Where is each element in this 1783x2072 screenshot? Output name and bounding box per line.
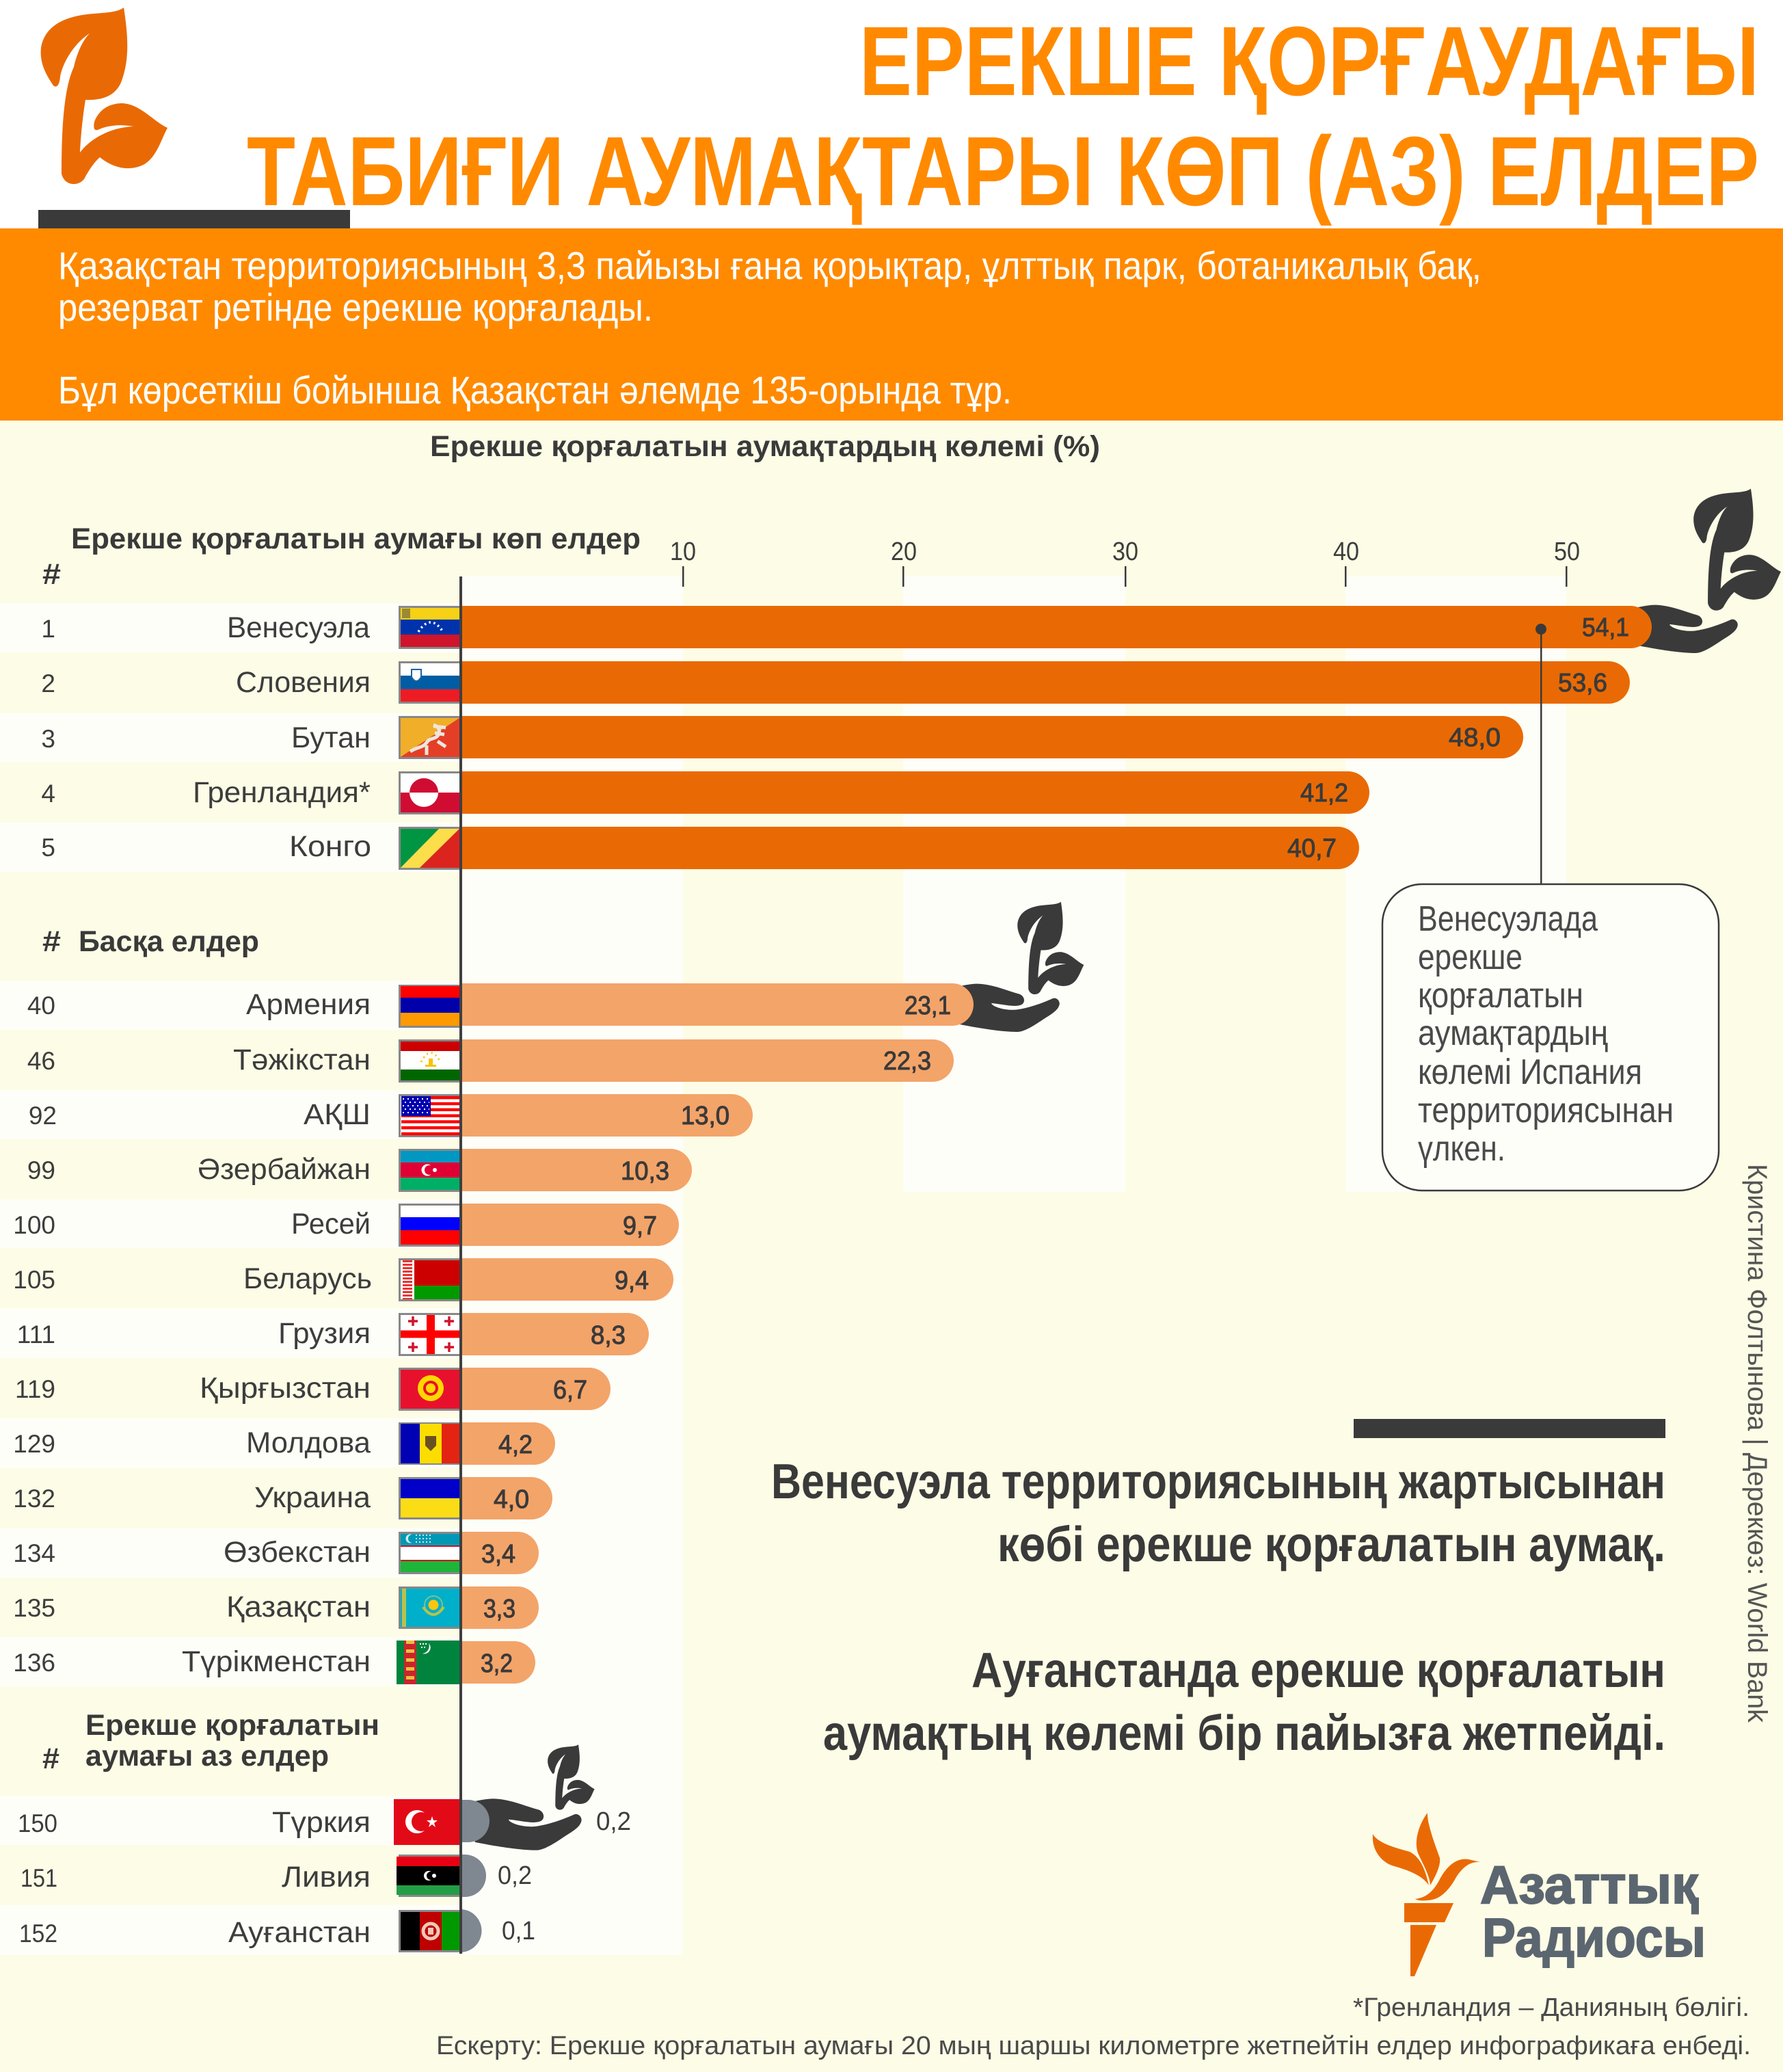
row: Greenland: 41,2: [1300, 779, 1348, 808]
row: USA: АҚШ: [304, 1098, 371, 1131]
row: Moldova: [0, 1418, 555, 1467]
callout: Venezuela compared to Spain: ерекше: [1418, 938, 1523, 977]
row: Armenia: [0, 981, 974, 1030]
row: Ukraine: 132: [13, 1485, 55, 1513]
heading: top countries: [42, 522, 641, 591]
icon: sprout mid: [1017, 902, 1084, 994]
icon: sprout bottom: [548, 1744, 595, 1810]
row: Uzbekistan: Өзбекстан: [224, 1536, 371, 1569]
title: [247, 6, 1759, 226]
row: Moldova: Молдова: [246, 1426, 371, 1459]
row: Tajikistan: 22,3: [883, 1047, 931, 1076]
flag: Venezuela: [399, 606, 459, 649]
row: Kazakhstan: Қазақстан: [226, 1591, 371, 1623]
row: Bhutan: 48,0: [1449, 723, 1501, 752]
callout: Venezuela compared to Spain: аумақтардың: [1418, 1013, 1608, 1053]
row: Congo: 40,7: [1287, 834, 1337, 863]
flag: Russia: [399, 1204, 459, 1247]
row: Belarus: 9,4: [615, 1266, 649, 1295]
panel: top five countries: [0, 603, 1738, 872]
row: Libya: Ливия: [282, 1861, 371, 1894]
row: Turkey: [0, 1796, 631, 1845]
row: Ukraine: 4,0: [494, 1485, 529, 1514]
row: Ukraine: [13, 1477, 552, 1519]
flag: Congo: [399, 827, 459, 870]
flag: Ukraine: [399, 1477, 459, 1519]
axis ticks: 30: [1112, 537, 1138, 566]
row: Kyrgyzstan: Қырғызстан: [200, 1372, 371, 1405]
logo: Azattyq Radiosy: Радиосы: [1482, 1907, 1706, 1968]
row: Ukraine: Украина: [254, 1481, 371, 1514]
flag: Tajikistan: [399, 1039, 459, 1083]
row: Greenland: [41, 771, 1369, 814]
row: USA: 92: [29, 1102, 57, 1130]
text block: key takeaways: көбі ерекше қорғалатын аумақ.: [997, 1517, 1665, 1572]
row: Turkey: Түркия: [272, 1806, 371, 1839]
chart title: Ерекше қорғалатын аумақтардың көлемі (%): [430, 430, 1100, 463]
logo: Azattyq Radiosy: Азаттық: [1480, 1855, 1699, 1915]
flag: Slovenia: [399, 661, 459, 704]
flag: Azerbaijan: [399, 1149, 459, 1192]
row: Venezuela: 1: [41, 615, 55, 643]
row: Libya: [21, 1855, 532, 1897]
row: Turkmenistan: 3,2: [481, 1649, 513, 1678]
logo: Azattyq Radiosy: [1373, 1813, 1706, 1976]
row: Armenia: 40: [27, 992, 55, 1020]
row: Bhutan: 3: [41, 725, 55, 753]
row: Libya: 151: [21, 1864, 57, 1892]
row: Bhutan: [0, 713, 1523, 762]
callout: Venezuela compared to Spain: территориясынан: [1418, 1091, 1674, 1130]
heading: top countries: #: [42, 558, 61, 591]
row: Russia: Ресей: [291, 1208, 371, 1240]
flag: Kazakhstan: [399, 1586, 459, 1629]
axis ticks: [670, 537, 1580, 587]
flag: Uzbekistan: [399, 1532, 459, 1574]
icon: hand under Armenia bar: [960, 984, 1060, 1032]
row: Kyrgyzstan: [15, 1368, 611, 1411]
row: Moldova: 4,2: [498, 1431, 533, 1459]
flag: Moldova: [399, 1422, 459, 1465]
callout: Venezuela compared to Spain: үлкен.: [1418, 1129, 1505, 1169]
heading: other countries: #: [42, 925, 61, 958]
footnotes: [436, 1993, 1751, 2060]
row: Turkey: 0,2: [596, 1807, 631, 1836]
panel: other countries: [0, 981, 1060, 1686]
row: Azerbaijan: 99: [27, 1156, 55, 1184]
row: Venezuela: 54,1: [1582, 613, 1629, 642]
heading: other countries: Басқа елдер: [79, 925, 259, 958]
panel: intro band: [0, 228, 1783, 421]
row: USA: 13,0: [681, 1102, 729, 1130]
row: Azerbaijan: [27, 1149, 692, 1192]
row: Belarus: Беларусь: [243, 1262, 372, 1295]
footnotes: Ескерту: Ерекше қорғалатын аумағы 20 мың шаршы километрге жетпейтін елдер инфографикаға енбеді.: [436, 2032, 1751, 2060]
row: Afghanistan: [0, 1905, 535, 1955]
panel: intro band: резерват ретінде ерекше қорғалады.: [58, 286, 653, 330]
row: Slovenia: 2: [41, 669, 55, 698]
heading: fewest protected countries: #: [42, 1742, 59, 1775]
icon: torch: [1373, 1813, 1480, 1976]
row: Kyrgyzstan: 6,7: [553, 1376, 587, 1405]
row: Georgia: 8,3: [591, 1321, 626, 1350]
icon: sprout top right: [1693, 489, 1781, 611]
row: Afghanistan: 0,1: [502, 1917, 535, 1945]
row: Congo: Конго: [289, 830, 371, 863]
row: Russia: 9,7: [623, 1212, 657, 1240]
panel: intro band: Қазақстан территориясының 3,3 пайызы ғана қорықтар, ұлттық парк, ботаникалық бақ,: [58, 244, 1482, 288]
flag: Turkmenistan: [397, 1641, 459, 1684]
axis ticks: 10: [670, 537, 696, 566]
row: Turkmenistan: 136: [13, 1649, 55, 1677]
axis ticks: 40: [1333, 537, 1359, 566]
row: Tajikistan: 46: [27, 1047, 55, 1075]
flag: Turkey: [394, 1799, 459, 1845]
credit: author and source: Кристина Фолтынова | Дереккөз: World Bank: [1742, 1164, 1772, 1723]
flag: Belarus: [399, 1258, 459, 1301]
callout: Venezuela compared to Spain: көлемі Испания: [1418, 1052, 1642, 1092]
row: Uzbekistan: 134: [13, 1539, 55, 1567]
flag: Bhutan: [399, 716, 459, 759]
flag: USA: [399, 1094, 459, 1137]
flag: Armenia: [399, 985, 459, 1028]
row: Congo: [0, 823, 1359, 872]
row: Georgia: [0, 1308, 649, 1358]
row: Russia: [0, 1199, 679, 1248]
row: Russia: 100: [13, 1211, 55, 1239]
heading: top countries: Ерекше қорғалатын аумағы көп елдер: [71, 522, 641, 555]
axis ticks: 50: [1554, 537, 1580, 566]
heading: fewest protected countries: [42, 1709, 379, 1775]
heading: fewest protected countries: Ерекше қорғалатын: [85, 1709, 379, 1742]
row: Greenland: 4: [41, 780, 55, 808]
row: Slovenia: 53,6: [1558, 669, 1607, 698]
row: Turkey: 150: [18, 1809, 57, 1837]
row: Belarus: 105: [13, 1266, 55, 1294]
row: Belarus: [13, 1258, 673, 1301]
row: Uzbekistan: [0, 1528, 539, 1578]
row: Moldova: 129: [13, 1430, 55, 1458]
row: Afghanistan: Ауғанстан: [228, 1916, 371, 1949]
flag: Greenland: [399, 771, 459, 814]
logo: orange leaf sprout: [41, 8, 167, 184]
icon: hand under top bar: [1638, 605, 1738, 653]
row: Georgia: 111: [17, 1320, 55, 1349]
row: Tajikistan: Тәжікстан: [233, 1044, 371, 1076]
text block: key takeaways: Ауғанстанда ерекше қорғалатын: [971, 1643, 1665, 1698]
row: Venezuela: [0, 603, 1652, 652]
row: Congo: 5: [41, 834, 55, 862]
row: Slovenia: [41, 661, 1630, 704]
row: Turkmenistan: Түрікменстан: [182, 1645, 371, 1678]
row: Venezuela: Венесуэла: [227, 611, 370, 644]
callout: Venezuela compared to Spain: Венесуэлада: [1418, 899, 1598, 939]
panel: bottom countries: [0, 1796, 631, 1955]
text block: key takeaways: [771, 1419, 1665, 1761]
flag: Afghanistan: [399, 1910, 459, 1952]
row: Afghanistan: 152: [19, 1920, 57, 1948]
row: Turkmenistan: [0, 1637, 535, 1686]
row: Kazakhstan: 135: [13, 1594, 55, 1622]
footnotes: *Гренландия – Данияның бөлігі.: [1353, 1993, 1750, 2022]
callout: Venezuela compared to Spain: қорғалатын: [1418, 976, 1583, 1015]
row: Azerbaijan: Әзербайжан: [198, 1153, 371, 1186]
row: Azerbaijan: 10,3: [621, 1157, 669, 1186]
row: Libya: 0,2: [498, 1861, 532, 1890]
callout: Venezuela compared to Spain: [1382, 624, 1719, 1191]
row: Kyrgyzstan: 119: [15, 1375, 55, 1403]
row: Slovenia: Словения: [236, 666, 371, 699]
row: Kazakhstan: [13, 1586, 539, 1629]
row: Armenia: Армения: [246, 988, 371, 1021]
row: Greenland: Гренландия*: [193, 776, 371, 809]
row: Uzbekistan: 3,4: [481, 1540, 515, 1569]
row: Bhutan: Бутан: [291, 721, 371, 754]
row: Tajikistan: [27, 1039, 954, 1083]
row: USA: [0, 1090, 753, 1139]
row: Armenia: 23,1: [904, 992, 951, 1020]
row: Kazakhstan: 3,3: [483, 1595, 515, 1623]
flag: Libya: [397, 1855, 459, 1897]
axis ticks: 20: [891, 537, 917, 566]
row: Georgia: Грузия: [278, 1317, 371, 1350]
flag: Georgia: [399, 1313, 459, 1356]
panel: intro band: Бұл көрсеткіш бойынша Қазақстан әлемде 135-орында тұр.: [58, 369, 1012, 412]
icon: hand under Turkey bar: [475, 1798, 582, 1850]
text block: key takeaways: аумақтың көлемі бір пайызға жетпейді.: [823, 1706, 1665, 1761]
heading: fewest protected countries: аумағы аз елдер: [85, 1740, 329, 1772]
flag: Kyrgyzstan: [399, 1368, 459, 1411]
